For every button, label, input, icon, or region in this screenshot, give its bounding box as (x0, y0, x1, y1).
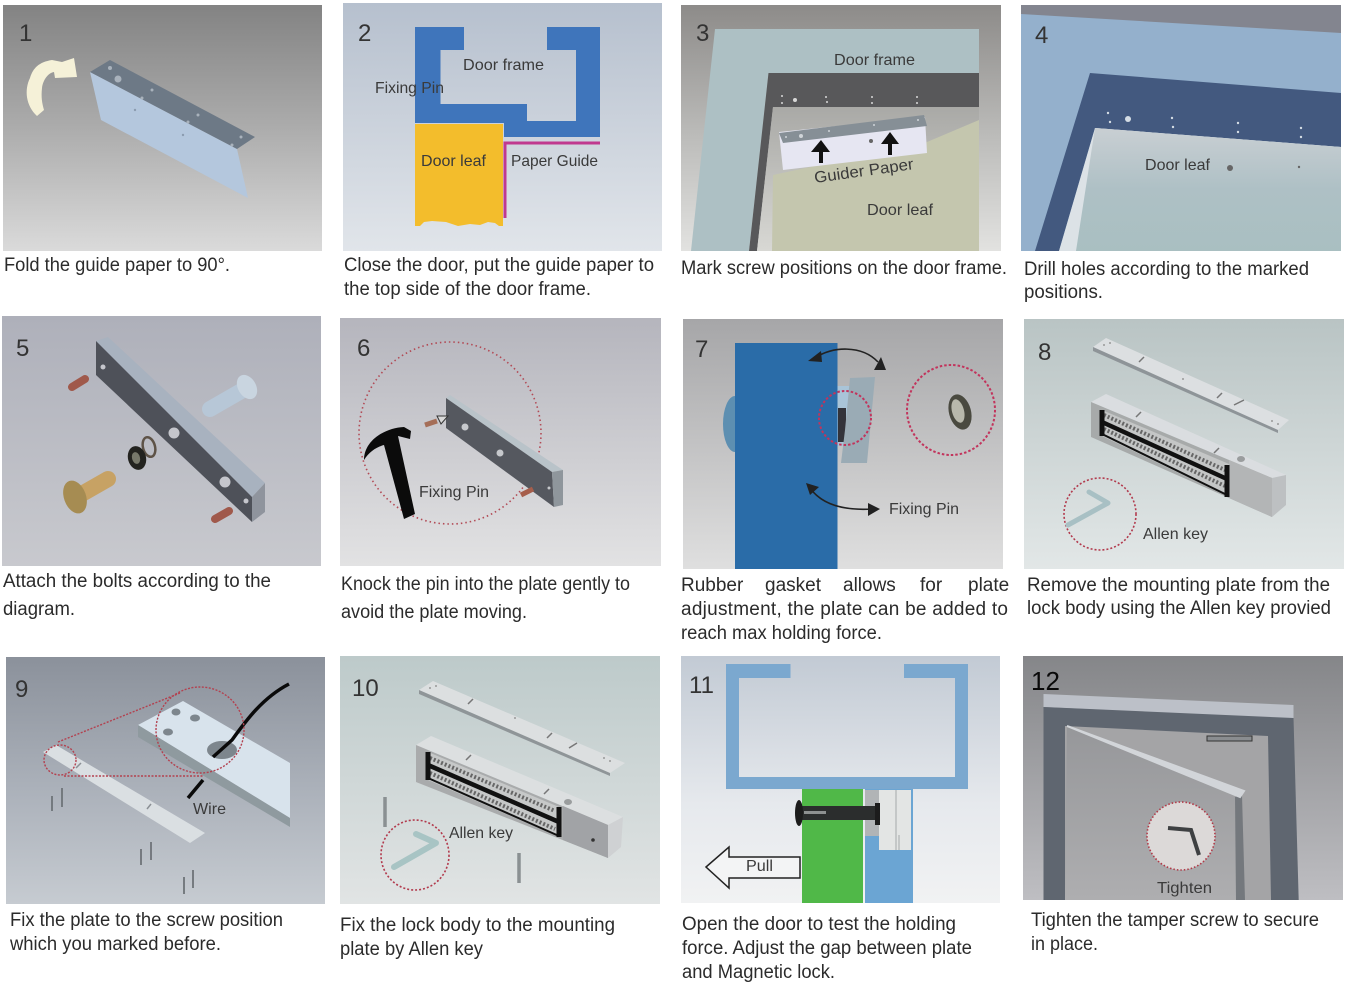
fixing pins (425, 416, 533, 495)
panel: step 11 test holding force (681, 656, 1000, 903)
black bolt (795, 800, 880, 826)
panel: step 3 mark screw positions (681, 5, 1001, 251)
rubber ring (945, 392, 975, 432)
caption: step 5 (3, 571, 271, 620)
caption: step 9 (9, 910, 283, 955)
magnetic lock detail (865, 790, 911, 850)
red detail lines and circles (44, 687, 244, 776)
step number 4: 4 (1035, 22, 1048, 49)
step number 3: 3 (696, 20, 709, 47)
caption: step 7: Rubber (681, 575, 744, 596)
label: paper guide: Paper Guide (511, 153, 598, 170)
green door leaf (802, 789, 863, 903)
caption: step 2 (344, 255, 654, 300)
blue door leaf (735, 343, 838, 569)
caption: step 10: plate by Allen key (340, 939, 483, 960)
door leaf (1059, 128, 1341, 251)
icon: curved fold arrow (27, 58, 77, 116)
arrow: pull (706, 847, 800, 888)
mounting plate (43, 745, 205, 843)
dark frame underside (1035, 73, 1341, 251)
screws (385, 797, 519, 883)
red circle with key (1147, 802, 1215, 870)
caption: step 8 (1027, 575, 1331, 619)
caption: step 7: reach max holding force. (681, 623, 882, 644)
step number 6: 6 (357, 335, 370, 362)
lock body (1091, 394, 1286, 517)
caption: step 10: Fix the lock body to the mounting (340, 915, 615, 936)
screws (52, 788, 193, 894)
mounting plate (1093, 338, 1289, 433)
caption: step 9: Fix the plate to the screw position (10, 910, 283, 931)
label: door frame: Door frame (834, 52, 915, 69)
enlarged plate detail (138, 701, 290, 827)
caption: step 5: Attach the bolts according to the (3, 571, 271, 592)
label: wire: Wire (193, 801, 226, 818)
caption: step 11: Open the door to test the holding (682, 914, 956, 935)
panel: step 7 rubber gasket (683, 319, 1003, 569)
folded guide paper (90, 60, 255, 198)
caption: step 3: Mark screw positions on the door frame. (681, 258, 1007, 279)
step number 10: 10 (352, 675, 379, 702)
red detail circle with Allen key (1064, 478, 1136, 550)
curved arrow: top (808, 349, 886, 370)
label: allen key: Allen key (449, 825, 513, 842)
caption: step 9: which you marked before. (9, 934, 221, 955)
label: tighten: Tighten (1157, 880, 1212, 897)
caption: step 7: plate (968, 575, 1009, 596)
panel: step 9 fix the plate (6, 657, 325, 904)
dome on door back (723, 396, 747, 452)
mounting bar (96, 337, 265, 522)
step number 8: 8 (1038, 339, 1051, 366)
label: door frame: Door frame (463, 57, 544, 74)
dark door frame (1044, 707, 1299, 900)
caption: step 2: Close the door, put the guide paper to (344, 255, 654, 276)
caption: step 6: avoid the plate moving. (341, 602, 527, 623)
label: allen key: Allen key (1143, 526, 1208, 543)
gasket and plate (836, 377, 875, 463)
icon: hammer (364, 427, 423, 519)
door leaf background (757, 107, 979, 251)
door frame top band (1044, 694, 1294, 719)
door leaf section (415, 124, 503, 226)
dark frame underside (749, 73, 979, 251)
caption: step 12: Tighten the tamper screw to secure (1031, 910, 1319, 931)
caption: step 12: in place. (1031, 934, 1098, 955)
panel: step 2 door section (343, 3, 662, 251)
door frame face (691, 29, 979, 251)
panel: step 6 knock pin (340, 318, 661, 566)
drilled holes (1107, 112, 1302, 138)
caption: step 8: lock body using the Allen key provied (1027, 598, 1331, 619)
caption: step 6: Knock the pin into the plate gently to (341, 574, 630, 595)
label: door leaf: Door leaf (421, 153, 487, 170)
caption: step 1: Fold the guide paper to 90°. (4, 255, 230, 276)
panel: step 8 remove mounting plate (1024, 319, 1344, 569)
caption: step 7 (681, 575, 1009, 644)
caption: step 11 (682, 914, 972, 983)
step number 7: 7 (695, 336, 708, 363)
label: guider paper: Guider Paper (813, 156, 915, 187)
caption: step 5: diagram. (3, 599, 75, 620)
blue lock body section (865, 789, 913, 903)
arrow: up left (811, 140, 830, 163)
label: fixing pin: Fixing Pin (419, 484, 489, 501)
black wire (188, 684, 289, 798)
caption: step 8: Remove the mounting plate from the (1027, 575, 1330, 596)
caption: step 7: adjustment, the plate can be added to (681, 599, 1008, 620)
panel: step 12 tighten tamper screw (1023, 656, 1343, 900)
paper guide line (505, 143, 600, 218)
label: pull: Pull (746, 858, 773, 875)
caption: step 6 (341, 574, 630, 623)
caption: step 7: allows (843, 575, 896, 596)
step number 1: 1 (19, 20, 32, 47)
caption: step 2: the top side of the door frame. (344, 279, 591, 300)
plate with holes (446, 395, 563, 507)
label: door leaf: Door leaf (1145, 157, 1211, 174)
mounting plate (419, 681, 625, 776)
caption: step 11: and Magnetic lock. (682, 962, 835, 983)
panel: step 1 fold guide paper (3, 5, 322, 251)
step number 9: 9 (15, 676, 28, 703)
label: fixing pin: Fixing Pin (889, 501, 959, 518)
caption: step 11: force. Adjust the gap between plate (682, 938, 972, 959)
fixing pins (72, 379, 229, 519)
caption: step 7: gasket (765, 575, 822, 596)
panel: step 5 attach bolts (2, 316, 321, 566)
frame opening (1065, 726, 1271, 900)
red detail circle: gasket (819, 391, 871, 445)
brass bolt (59, 477, 108, 517)
red detail circle with Allen key (381, 820, 449, 890)
nut (125, 444, 149, 472)
caption: step 4: Drill holes according to the marked (1024, 259, 1309, 280)
step number 5: 5 (16, 335, 29, 362)
dotted detail circle (359, 342, 541, 524)
lock body (416, 736, 623, 858)
label: fixing pin: Fixing Pin (375, 80, 444, 97)
caption: step 4: positions. (1024, 282, 1103, 303)
magnetic lock (1207, 736, 1252, 741)
caption: step 12 (1031, 910, 1319, 955)
door frame section (415, 27, 600, 137)
open door leaf (1065, 726, 1245, 900)
curved arrow: bottom (806, 483, 880, 516)
panel: step 4 drill holes (1021, 5, 1341, 251)
step number 2: 2 (358, 20, 371, 47)
guide paper on door (779, 115, 927, 170)
silver bolt (210, 371, 261, 409)
door frame section (726, 664, 968, 789)
panel: step 10 fix lock body (340, 656, 660, 904)
arrow: up right (881, 132, 899, 155)
label: door leaf: Door leaf (867, 202, 934, 219)
caption: step 4 (1024, 259, 1309, 303)
step number 11: 11 (689, 672, 714, 699)
gasket ring (141, 436, 157, 458)
step number 12: 12 (1031, 666, 1060, 696)
caption: step 10 (340, 915, 615, 960)
red detail circle: ring (907, 365, 995, 455)
caption: step 7: for (920, 575, 943, 596)
